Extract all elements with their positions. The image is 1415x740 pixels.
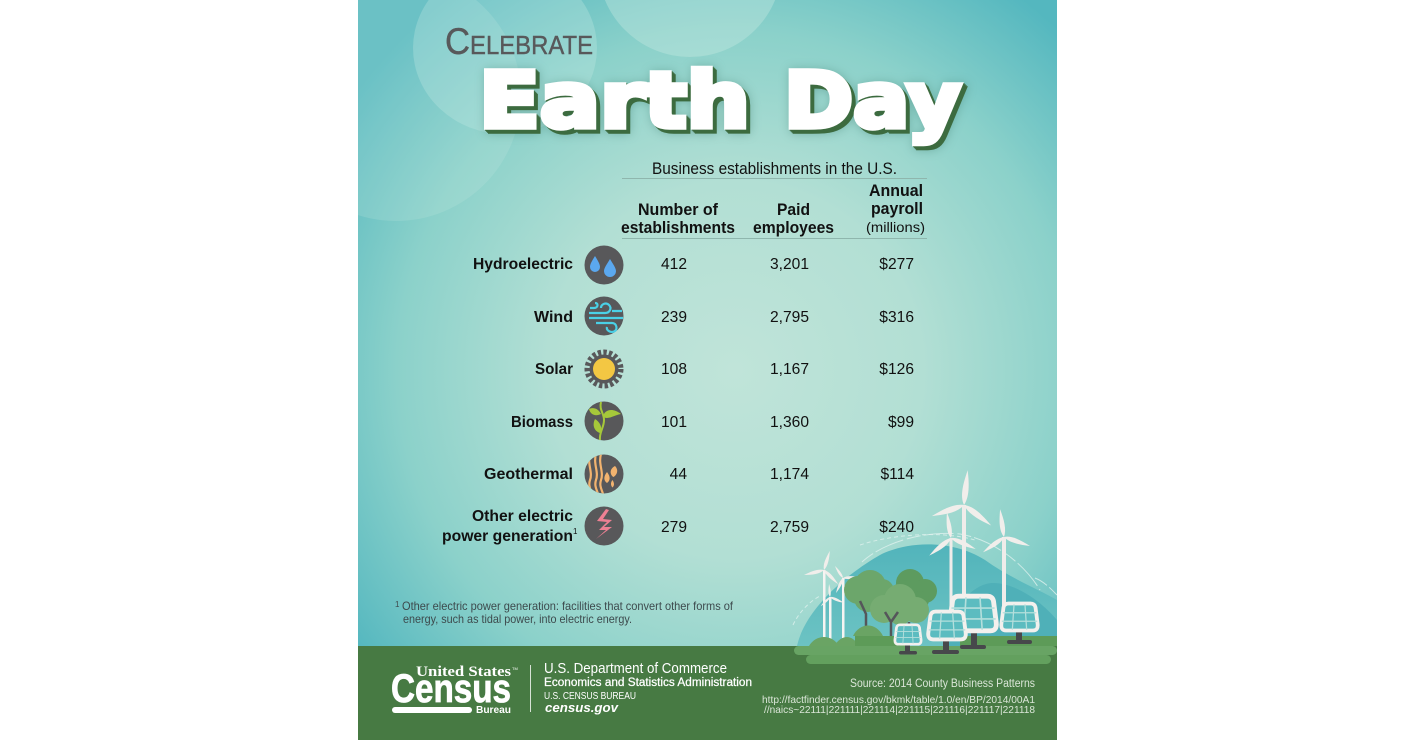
source: Source: 2014 County Business Patterns xyxy=(850,678,1035,690)
column header: number of establishments: Number of xyxy=(638,201,718,219)
census logo: United States xyxy=(416,664,511,680)
table heading: Business establishments in the U.S. xyxy=(652,159,897,178)
row: geothermal: 1,174 xyxy=(770,466,809,483)
column header: paid employees: Paid xyxy=(777,201,810,219)
row: wind: 239 xyxy=(661,309,687,326)
census logo: Census xyxy=(391,667,511,711)
solar panels xyxy=(895,596,1038,654)
row: hydroelectric: 3,201 xyxy=(770,256,809,273)
row: solar: $126 xyxy=(879,361,914,378)
department text: U.S. CENSUS BUREAU xyxy=(544,691,636,702)
column header: annual payroll: (millions) xyxy=(866,219,925,235)
column header: number of establishments: establishments xyxy=(621,219,735,237)
footnote: Other electric power generation: facilities that convert other forms of xyxy=(402,599,734,613)
row: other electric power generation: $240 xyxy=(879,519,914,536)
icon: geothermal layers xyxy=(584,454,624,494)
column header: paid employees xyxy=(753,201,834,237)
department text: U.S. Department of Commerce xyxy=(544,661,727,677)
wind turbines xyxy=(804,470,1031,639)
icon: wind xyxy=(584,296,624,336)
row: other electric power generation xyxy=(442,506,914,546)
title: Celebrate: CELEBRATE xyxy=(445,21,593,62)
row: solar xyxy=(535,352,914,386)
row: hydroelectric: Hydroelectric xyxy=(473,256,573,273)
row: biomass: $99 xyxy=(888,414,914,431)
row: solar: Solar xyxy=(535,361,573,378)
row: wind: Wind xyxy=(534,309,573,326)
column header: annual payroll: Annual xyxy=(869,182,923,200)
row: geothermal: $114 xyxy=(880,466,914,483)
source: //naics~22111|221111|221114|221115|221116|221117|221118 xyxy=(764,704,1035,716)
department text: Economics and Statistics Administration xyxy=(544,677,752,689)
footnote: 1 xyxy=(395,600,400,609)
row: geothermal xyxy=(484,454,914,494)
row: solar: 108 xyxy=(661,361,687,378)
row: other electric power generation: 2,759 xyxy=(770,519,809,536)
row: geothermal: Geothermal xyxy=(484,466,573,483)
source: http://factfinder.census.gov/bkmk/table/1.0/en/BP/2014/00A1 xyxy=(762,694,1035,706)
icon: sun xyxy=(588,352,620,386)
row: wind: $316 xyxy=(879,309,914,326)
row: biomass: 101 xyxy=(661,414,687,431)
row: wind xyxy=(534,296,914,336)
column header: annual payroll: payroll xyxy=(871,200,923,218)
ground and grass xyxy=(358,626,1057,740)
title: Earth Day: Day xyxy=(784,57,961,146)
hills xyxy=(793,533,1057,646)
row: geothermal: 44 xyxy=(670,466,687,483)
icon: sprout xyxy=(584,402,624,440)
column header: annual payroll xyxy=(866,182,925,235)
row: other electric power generation: power generation xyxy=(442,528,573,545)
background panel xyxy=(358,0,1057,646)
footnote xyxy=(395,599,734,626)
row: solar: 1,167 xyxy=(770,361,809,378)
row: biomass xyxy=(511,402,914,440)
row: other electric power generation: Other electric xyxy=(472,508,573,525)
row: wind: 2,795 xyxy=(770,309,809,326)
footnote: energy, such as tidal power, into electric energy. xyxy=(403,612,632,626)
icon: water drops xyxy=(584,246,624,284)
department text xyxy=(544,661,752,715)
icon: lightning bolt xyxy=(584,506,624,546)
source xyxy=(762,678,1035,716)
row: hydroelectric: $277 xyxy=(879,256,914,273)
department text: census.gov xyxy=(545,700,619,715)
column header: number of establishments xyxy=(621,201,735,237)
column header: paid employees: employees xyxy=(753,219,834,237)
title: Earth Day xyxy=(479,57,961,146)
census logo: Bureau xyxy=(476,704,511,716)
illustration: renewable landscape xyxy=(358,470,1057,740)
trees xyxy=(844,569,937,638)
census logo: TM xyxy=(512,666,518,671)
row: hydroelectric xyxy=(473,246,914,284)
title: Earth Day: Earth xyxy=(479,57,750,146)
row: biomass: 1,360 xyxy=(770,414,809,431)
row: other electric power generation: 279 xyxy=(661,519,687,536)
row: hydroelectric: 412 xyxy=(661,256,687,273)
row: other electric power generation: 1 xyxy=(573,527,578,536)
row: biomass: Biomass xyxy=(511,414,573,431)
